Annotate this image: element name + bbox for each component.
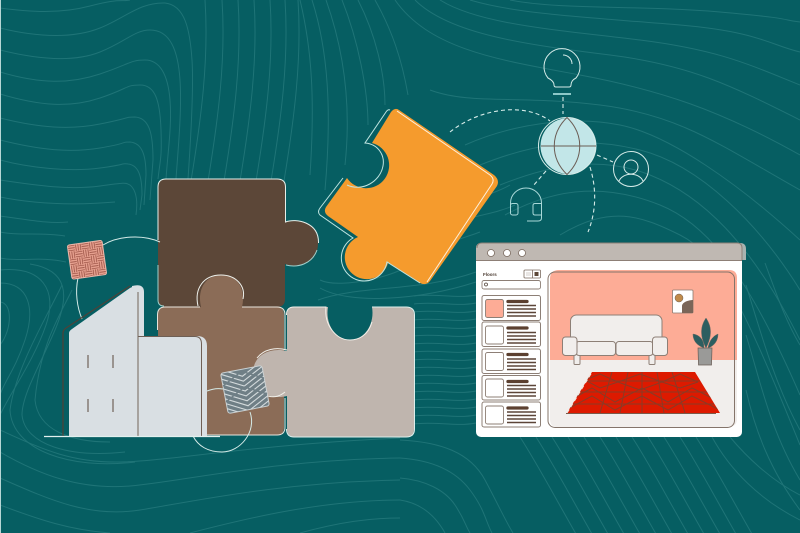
dashed connectors	[450, 97, 613, 232]
view toggle	[524, 270, 540, 278]
connector curves	[77, 237, 252, 452]
picture frame	[672, 290, 693, 313]
icon: headset	[510, 188, 542, 221]
sidebar heading: Floors	[483, 272, 497, 277]
building	[44, 285, 220, 436]
browser window	[476, 243, 746, 437]
title bar	[476, 243, 742, 260]
list cards	[482, 296, 540, 427]
rug	[566, 372, 720, 414]
sofa	[562, 315, 668, 364]
puzzle piece: medium brown	[158, 275, 285, 435]
search box	[482, 280, 540, 289]
window body	[476, 250, 742, 437]
room floor	[550, 360, 737, 427]
window dots	[488, 250, 526, 256]
room wall	[550, 270, 737, 360]
puzzle piece: orange	[318, 109, 498, 284]
puzzle piece: light taupe	[253, 307, 414, 437]
icon: light bulb	[544, 49, 580, 94]
title bar back strip	[730, 243, 746, 260]
room outline	[548, 272, 734, 428]
image left edge	[0, 0, 1, 533]
icon: user	[614, 152, 648, 186]
swatch: red weave	[67, 240, 107, 279]
icon: globe	[538, 118, 596, 174]
plant	[693, 318, 718, 365]
swatch: grey chevron	[220, 366, 270, 414]
puzzle piece: dark brown	[158, 179, 319, 307]
